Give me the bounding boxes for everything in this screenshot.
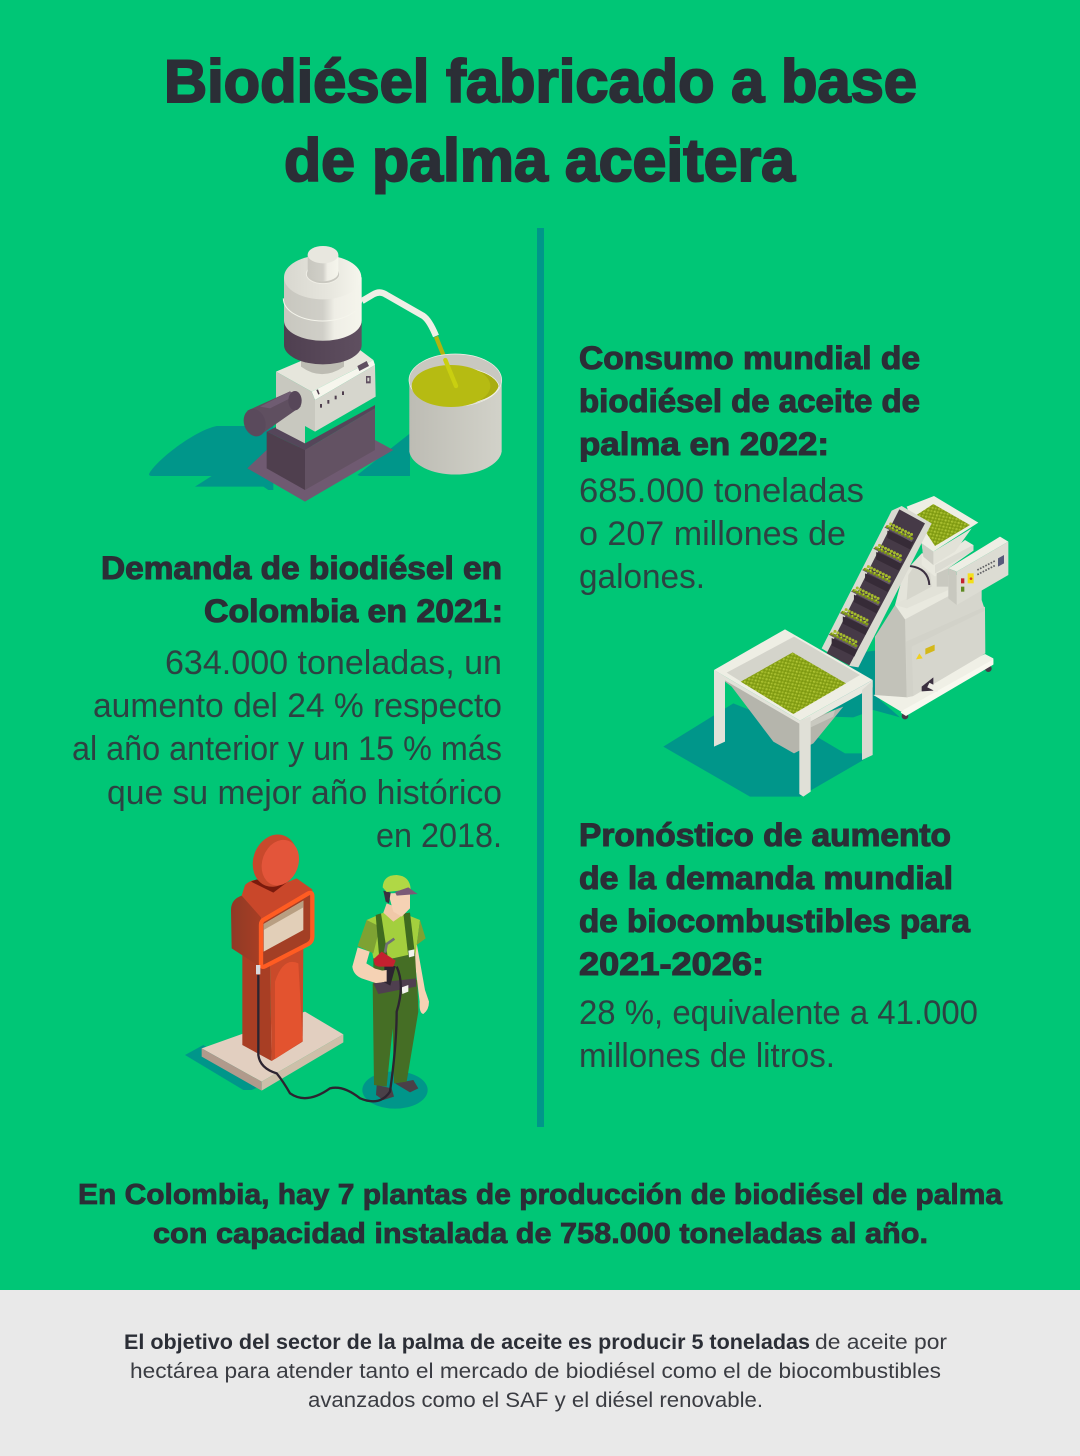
bucket — [409, 380, 502, 475]
callout: Colombia plants: con capacidad instalada de 758.000 toneladas al año. — [153, 1218, 928, 1250]
icon: conveyor and hopper machine — [663, 496, 1008, 797]
text: Colombia demand figures: 634.000 toneladas, un — [165, 644, 502, 682]
text: Colombia demand figures: aumento del 24 % respecto — [93, 687, 502, 725]
heading: Colombia demand: Demanda de biodiésel en — [101, 550, 502, 586]
text: Colombia demand figures: que su mejor año histórico — [107, 774, 502, 812]
conveyor belt with olive trays — [822, 506, 932, 667]
footer text: avanzados como el SAF y el diésel renovable. — [308, 1388, 763, 1412]
title — [164, 48, 917, 194]
icon: fuel pump and worker — [185, 828, 429, 1109]
icon: oil press with bucket — [149, 246, 502, 502]
text: world consumption figures — [579, 472, 864, 596]
heading: world consumption — [579, 340, 920, 462]
text: forecast figures — [579, 994, 978, 1075]
heading: world consumption: biodiésel de aceite de — [579, 383, 920, 419]
fuel hose — [258, 967, 401, 1101]
text: forecast figures: millones de litros. — [579, 1037, 835, 1075]
column divider — [537, 228, 544, 1127]
callout: Colombia plants: En Colombia, hay 7 plantas de producción de biodiésel de palma — [78, 1179, 1003, 1211]
title: de palma aceitera — [284, 127, 796, 194]
text: Colombia demand figures: al año anterior y un 15 % más — [72, 730, 502, 768]
lower hopper with olives — [714, 629, 873, 797]
heading: biofuel demand forecast: de biocombustibles para — [579, 903, 970, 939]
title: Biodiésel fabricado a base — [164, 48, 917, 115]
heading: biofuel demand forecast: Pronóstico de aumento — [579, 817, 951, 853]
footer text — [124, 1330, 947, 1412]
machine body — [873, 575, 993, 719]
heading: Colombia demand — [101, 550, 503, 629]
upper hopper and control box — [895, 496, 1008, 608]
heading: Colombia demand: Colombia en 2021: — [204, 593, 503, 629]
callout: Colombia plants — [78, 1179, 1003, 1250]
footer band — [0, 1290, 1080, 1456]
text: world consumption figures: o 207 millones de — [579, 515, 846, 553]
pipe and oil stream — [362, 292, 436, 336]
footer text: El objetivo del sector de la palma de aceite es producir 5 toneladas — [124, 1330, 810, 1354]
heading: biofuel demand forecast: 2021-2026: — [579, 946, 764, 982]
text: Colombia demand figures: en 2018. — [376, 817, 502, 855]
text: forecast figures: 28 %, equivalente a 41.000 — [579, 994, 978, 1032]
heading: world consumption: palma en 2022: — [579, 426, 829, 462]
text: world consumption figures: 685.000 toneladas — [579, 472, 864, 510]
footer text: hectárea para atender tanto el mercado de biodiésel como el de biocombustibles — [130, 1359, 941, 1383]
footer text: de aceite por — [815, 1330, 947, 1354]
pump head with display — [231, 828, 312, 967]
worker — [352, 875, 429, 1100]
text: world consumption figures: galones. — [579, 558, 705, 596]
heading: biofuel demand forecast — [579, 817, 970, 982]
press base and body — [240, 350, 393, 502]
text: Colombia demand figures — [72, 644, 502, 855]
heading: biofuel demand forecast: de la demanda mundial — [579, 860, 953, 896]
heading: world consumption: Consumo mundial de — [579, 340, 920, 376]
